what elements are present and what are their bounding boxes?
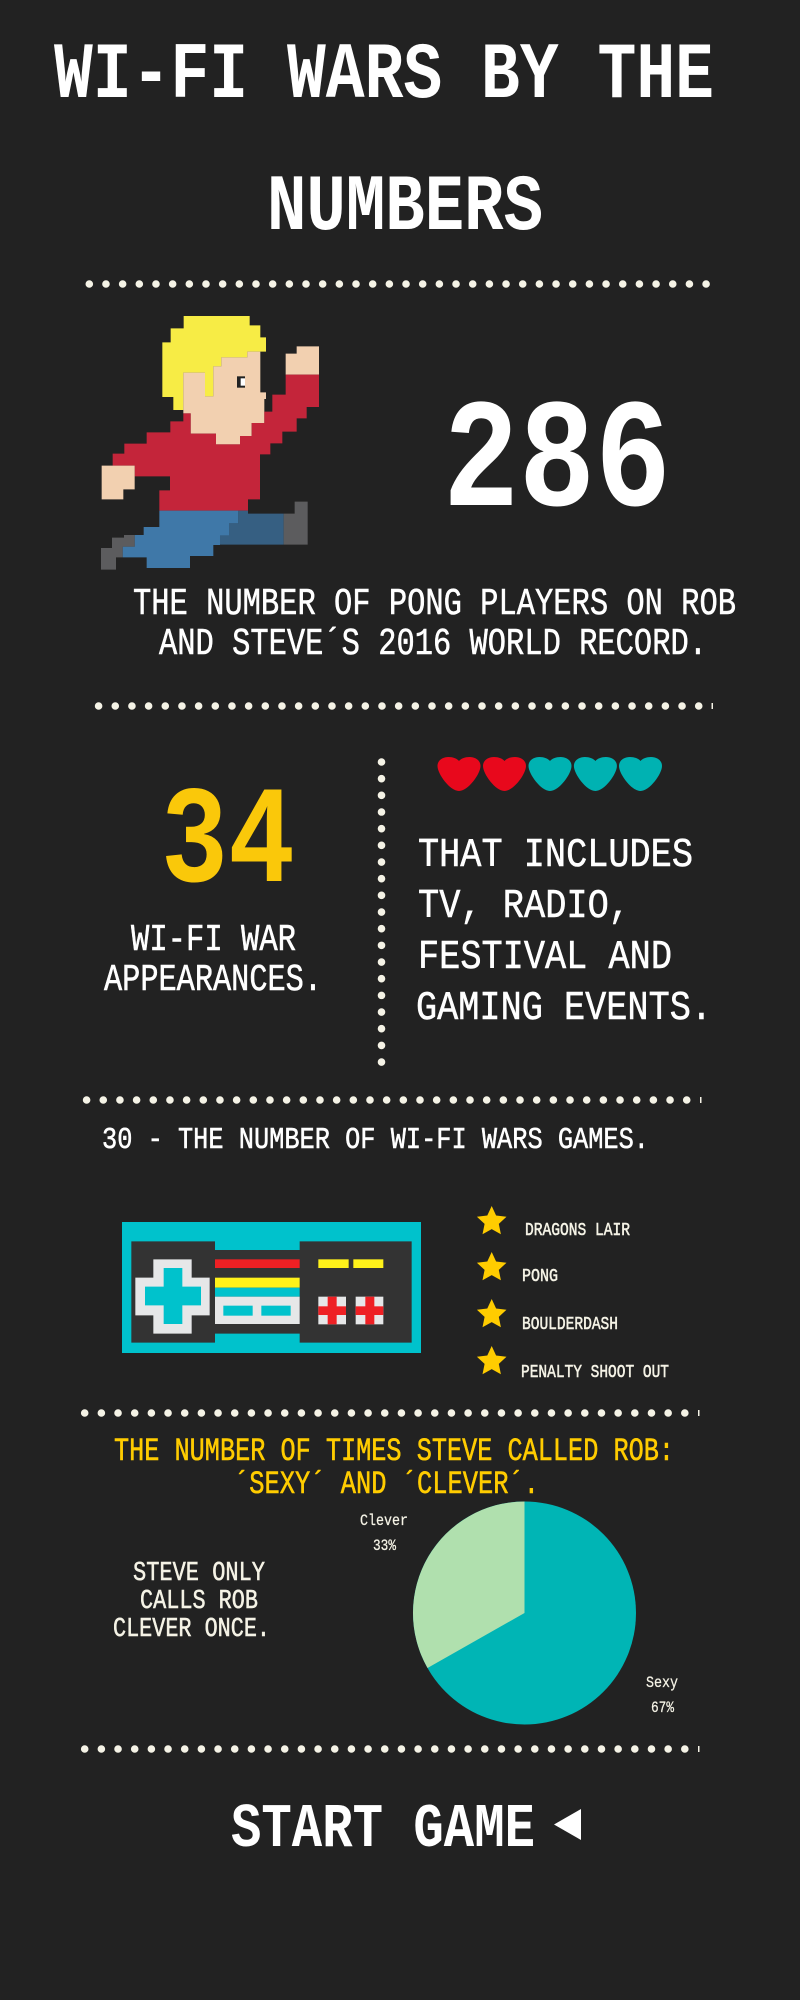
text block: includes tv, radio, festival and gaming events: FESTIVAL AND [418,935,672,981]
heading: times steve called rob [114,1433,674,1503]
caption: wi-fi war appearances: APPEARANCES. [104,959,322,1002]
text block: steve only calls rob clever once [113,1559,270,1645]
list: games with stars: PENALTY SHOOT OUT [521,1362,669,1383]
text block: includes tv, radio, festival and gaming events: GAMING EVENTS. [416,986,712,1032]
pie chart: sexy vs clever: Sexy [646,1674,678,1692]
list: games with stars: PONG [522,1266,558,1287]
text block: includes tv, radio, festival and gaming events [416,833,712,1032]
list: games with stars [477,1206,669,1383]
big number: 286: 286 [443,376,671,552]
list: games with stars: DRAGONS LAIR [525,1220,630,1241]
pie chart: sexy vs clever: Clever [360,1512,408,1530]
title [54,31,714,254]
list: games with stars: BOULDERDASH [522,1314,618,1335]
pie chart: sexy vs clever: 33% [373,1537,396,1555]
icon: game controller [122,1222,421,1353]
text block: steve only calls rob clever once: CLEVER ONCE. [113,1615,270,1645]
pie chart: sexy vs clever [360,1502,678,1724]
text block: steve only calls rob clever once: STEVE ONLY [133,1559,265,1589]
title: NUMBERS [267,163,543,254]
caption: wi-fi war appearances: WI-FI WAR [131,919,296,962]
text block: steve only calls rob clever once: CALLS ROB [140,1587,258,1617]
caption: pong players record [133,583,736,666]
big number: 34: 34 [161,765,295,923]
caption: wi-fi war appearances [104,919,322,1002]
heading: number of games: 30 - THE NUMBER OF WI-FI WARS GAMES. [102,1123,649,1158]
icon: arrow [554,1809,581,1840]
icon: pixel art running character [101,316,319,570]
heading: times steve called rob: ´SEXY´ AND ´CLEVER´. [234,1466,539,1503]
text block: includes tv, radio, festival and gaming events: THAT INCLUDES [418,833,693,879]
icon: row of five hearts [438,757,662,791]
pie chart: sexy vs clever: 67% [651,1699,674,1717]
call to action: start game: START GAME [231,1794,535,1865]
text block: includes tv, radio, festival and gaming events: TV, RADIO, [418,884,630,930]
